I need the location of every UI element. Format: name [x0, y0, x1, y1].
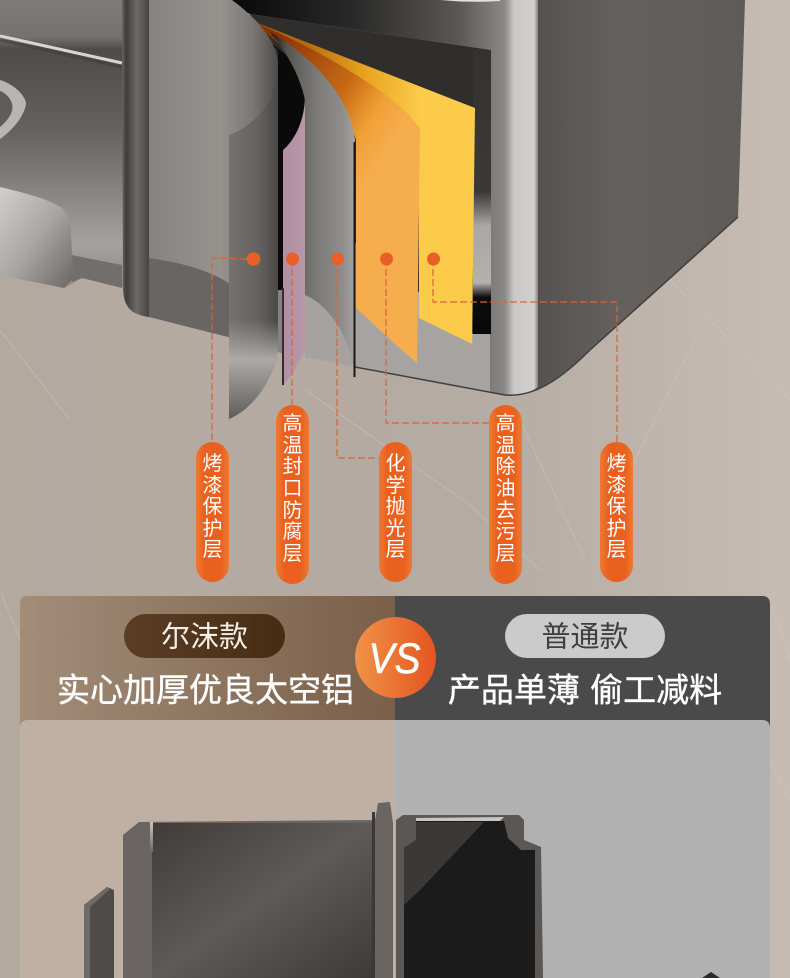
label pill: 高温封口防腐层 — [276, 405, 309, 584]
layered sheets cutaway — [122, 0, 475, 419]
label pill: 化学抛光层 — [379, 442, 412, 582]
sheet: pink sealing — [283, 95, 305, 385]
left rounded strip — [122, 0, 149, 317]
upper front face — [149, 0, 278, 283]
label pill: 高温除油去污层: 高 — [496, 412, 516, 435]
interior cavity — [250, 14, 491, 334]
label pill: 烤漆保护层 right: 烤 — [606, 452, 626, 475]
label pill: 高温封口防腐层: 封 — [282, 455, 302, 478]
badge: 尔沫款: 尔沫款 — [161, 620, 248, 654]
top cavity band — [220, 0, 491, 50]
icon: small dark tip — [702, 972, 720, 978]
label pill: 烤漆保护层: 层 — [202, 539, 222, 561]
leader lines and markers — [212, 252, 617, 458]
panel: header right — [395, 596, 770, 730]
product: wall rail and hook — [0, 0, 125, 288]
label pill: 高温除油去污层: 去 — [496, 499, 516, 522]
label pill: 高温封口防腐层: 层 — [282, 543, 302, 565]
label pill: 化学抛光层: 化 — [386, 452, 406, 475]
badge: 普通款 — [505, 614, 665, 658]
label pill: 烤漆保护层 right: 护 — [606, 517, 626, 540]
label pill: 高温封口防腐层: 高 — [282, 412, 302, 435]
sheet: outer grey paint — [229, 65, 278, 419]
icon: small bracket — [72, 255, 122, 288]
heading: right claim: 产品单薄 偷工减料 — [448, 672, 722, 708]
label pill: 烤漆保护层: 保 — [202, 495, 222, 518]
label pill: 烤漆保护层: 烤 — [202, 452, 222, 475]
label pill: 化学抛光层: 学 — [386, 474, 406, 497]
label pill: 烤漆保护层: 护 — [202, 517, 222, 540]
badge: 普通款: 普通款 — [541, 620, 629, 654]
corner highlight — [490, 0, 538, 395]
badge: 尔沫款 — [124, 614, 285, 658]
label pill: 化学抛光层: 光 — [386, 517, 406, 540]
label pill: 高温除油去污层: 除 — [496, 455, 516, 478]
label pill: 高温封口防腐层: 腐 — [282, 520, 302, 543]
product: thin ordinary profile — [396, 815, 543, 978]
label pill: 高温封口防腐层: 防 — [282, 499, 302, 522]
heading: left claim: 实心加厚优良太空铝 — [57, 672, 354, 708]
label pill: 高温除油去污层: 层 — [496, 543, 516, 565]
badge: VS — [355, 617, 436, 698]
sheet: orange degreasing — [250, 20, 420, 363]
label pill: 高温除油去污层: 温 — [496, 434, 516, 457]
label pill: 烤漆保护层: 漆 — [202, 474, 222, 497]
body bottom edge — [355, 217, 738, 395]
sheet: yellow outer paint — [250, 20, 475, 344]
label pill: 化学抛光层: 抛 — [386, 495, 406, 518]
label pill: 高温除油去污层: 油 — [496, 477, 516, 500]
panel: comparison image area — [20, 720, 770, 978]
label pill: 高温除油去污层 — [489, 405, 522, 584]
product: organizer body — [220, 0, 745, 395]
label pill: 烤漆保护层 right: 保 — [606, 495, 626, 518]
sheet edge: black line — [354, 142, 356, 377]
icon: metal hook — [0, 187, 74, 288]
label pill: 化学抛光层: 层 — [386, 539, 406, 561]
label pill: 高温除油去污层: 污 — [496, 520, 516, 543]
label pill: 烤漆保护层 right: 漆 — [606, 474, 626, 497]
lower dark front — [149, 258, 232, 338]
sheet: silver polished — [270, 32, 355, 365]
badge: VS: VS — [368, 635, 421, 683]
panel: header left — [20, 596, 395, 730]
label pill: 烤漆保护层 right: 层 — [606, 539, 626, 561]
label pill: 烤漆保护层 — [196, 442, 229, 582]
label pill: 高温封口防腐层: 温 — [282, 434, 302, 457]
label pill: 高温封口防腐层: 口 — [282, 478, 302, 500]
product: thick aluminium profile — [84, 802, 393, 978]
label pill: 烤漆保护层 right — [600, 442, 633, 582]
